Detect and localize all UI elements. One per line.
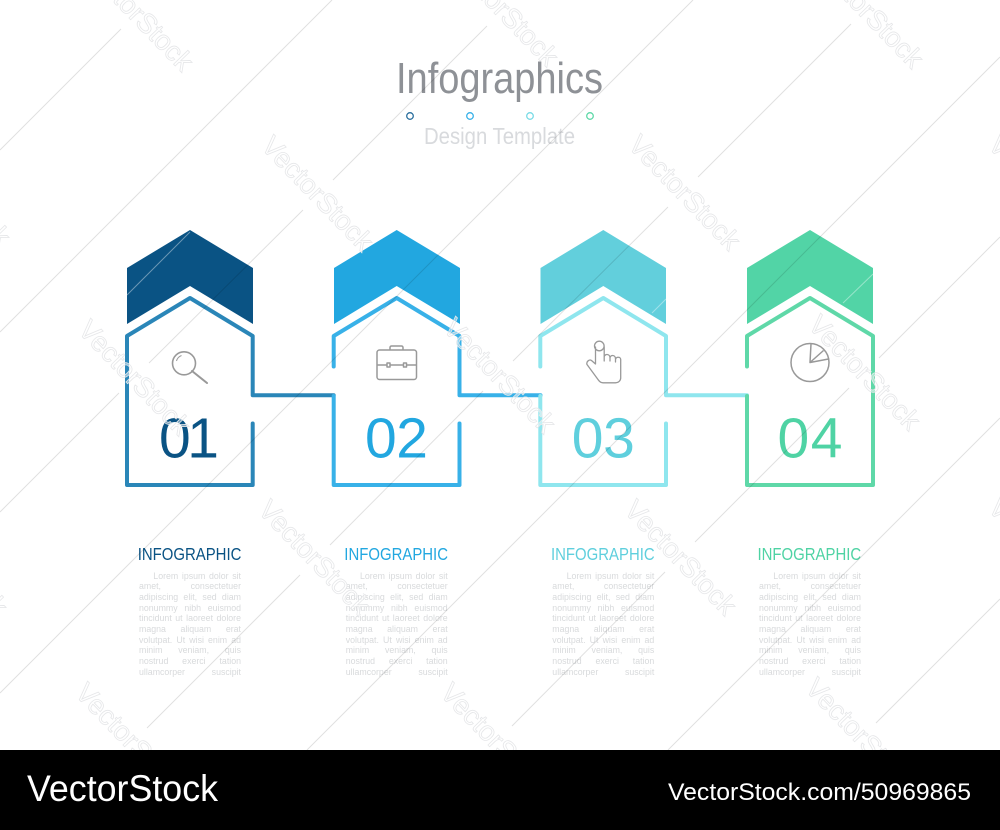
number 01: 01 <box>159 406 219 470</box>
body text 3: volutpat. Ut wisi enim ad <box>552 635 654 645</box>
body text 2: Lorem ipsum dolor sit <box>360 570 448 580</box>
body text 1: volutpat. Ut wisi enim ad <box>139 635 241 645</box>
body text 4: tincidunt ut laoreet dolore <box>759 613 861 623</box>
step 2 graphic <box>334 230 540 485</box>
house outline 4 <box>747 298 873 485</box>
chevron 1 <box>127 230 253 324</box>
icon: pie chart <box>791 344 829 382</box>
number 04: 04 <box>778 406 842 470</box>
body text 4: nonummy nibh euismod <box>759 603 861 613</box>
step 3 graphic <box>540 230 747 485</box>
watermark text: VectorStock <box>70 677 194 804</box>
watermark text: VectorStock <box>73 314 197 441</box>
body text 1: minim veniam, quis <box>139 645 241 655</box>
watermark highlights on chevrons <box>127 232 873 313</box>
footer bar <box>0 750 1000 830</box>
title: Infographics <box>396 54 603 103</box>
heading 2: INFOGRAPHIC <box>344 544 448 564</box>
icon: magnifier <box>172 352 207 383</box>
number 03: 03 <box>572 406 635 470</box>
body text 3: tincidunt ut laoreet dolore <box>552 613 654 623</box>
body text 2: nonummy nibh euismod <box>346 603 448 613</box>
subtitle: Design Template <box>424 123 575 149</box>
house outline 2 with connector <box>334 298 540 485</box>
body text 1: amet, consectetuer <box>139 581 241 591</box>
progress dots <box>407 113 593 119</box>
watermark text: VectorStock <box>253 494 377 621</box>
watermark text: VectorStock <box>256 130 380 257</box>
body text 1: nonummy nibh euismod <box>139 603 241 613</box>
footer logo text: VectorStock <box>27 768 218 809</box>
body text 2: minim veniam, quis <box>346 645 448 655</box>
body text 2: magna aliquam erat <box>346 624 448 634</box>
heading 4: INFOGRAPHIC <box>758 544 861 564</box>
icon: hand pointer <box>587 341 621 383</box>
body text 2: amet, consectetuer <box>346 581 448 591</box>
body text 1: ullamcorper suscipit <box>139 667 241 677</box>
icon: briefcase <box>377 346 416 380</box>
body text 4: Lorem ipsum dolor sit <box>773 570 861 580</box>
chevron 4 <box>747 230 873 324</box>
body text 1 <box>139 570 241 677</box>
body text 2: volutpat. Ut wisi enim ad <box>346 635 448 645</box>
body text 4: magna aliquam erat <box>759 624 861 634</box>
body text 2: adipiscing elit, sed diam <box>346 592 448 602</box>
body text 1: adipiscing elit, sed diam <box>139 592 241 602</box>
body text 4: adipiscing elit, sed diam <box>759 592 861 602</box>
body text 1: magna aliquam erat <box>139 624 241 634</box>
body text 3: Lorem ipsum dolor sit <box>567 570 654 580</box>
watermark text: VectorStock <box>800 672 924 799</box>
body text 4: nostrud exerci tation <box>759 656 861 666</box>
step 1 graphic <box>127 230 334 485</box>
heading 3: INFOGRAPHIC <box>551 544 655 564</box>
watermark text: VectorStock <box>803 309 927 436</box>
watermark text: VectorStock <box>435 677 559 804</box>
chevron 3 <box>540 230 666 324</box>
number 02: 02 <box>365 406 428 470</box>
step 4 graphic <box>747 230 873 485</box>
body text 1: tincidunt ut laoreet dolore <box>139 613 241 623</box>
body text 3: minim veniam, quis <box>552 645 654 655</box>
watermark text: VectorStock <box>623 129 747 256</box>
footer url: VectorStock.com/50969865 <box>668 779 971 806</box>
body text 2 <box>346 570 448 677</box>
body text 3: magna aliquam erat <box>552 624 654 634</box>
body text 3: adipiscing elit, sed diam <box>552 592 654 602</box>
body text 3: ullamcorper suscipit <box>552 667 654 677</box>
watermark text: VectorStock <box>619 494 743 621</box>
body text 2: ullamcorper suscipit <box>346 667 448 677</box>
house outline 3 with connector <box>540 298 747 485</box>
body text 3: nostrud exerci tation <box>552 656 654 666</box>
body text 1: Lorem ipsum dolor sit <box>153 570 241 580</box>
body text 4: minim veniam, quis <box>759 645 861 655</box>
body text 4: amet, consectetuer <box>759 581 861 591</box>
body text 2: tincidunt ut laoreet dolore <box>346 613 448 623</box>
body text 4 <box>759 570 861 677</box>
body text 3: nonummy nibh euismod <box>552 603 654 613</box>
house outline 1 with connector <box>127 298 334 485</box>
body text 2: nostrud exerci tation <box>346 656 448 666</box>
body text 3: amet, consectetuer <box>552 581 654 591</box>
body text 1: nostrud exerci tation <box>139 656 241 666</box>
body text 4: volutpat. Ut wisi enim ad <box>759 635 861 645</box>
watermark text: VectorStock <box>438 312 562 439</box>
heading 1: INFOGRAPHIC <box>138 544 241 564</box>
body text 3 <box>552 570 654 677</box>
chevron 2 <box>334 230 460 324</box>
body text 4: ullamcorper suscipit <box>759 667 861 677</box>
